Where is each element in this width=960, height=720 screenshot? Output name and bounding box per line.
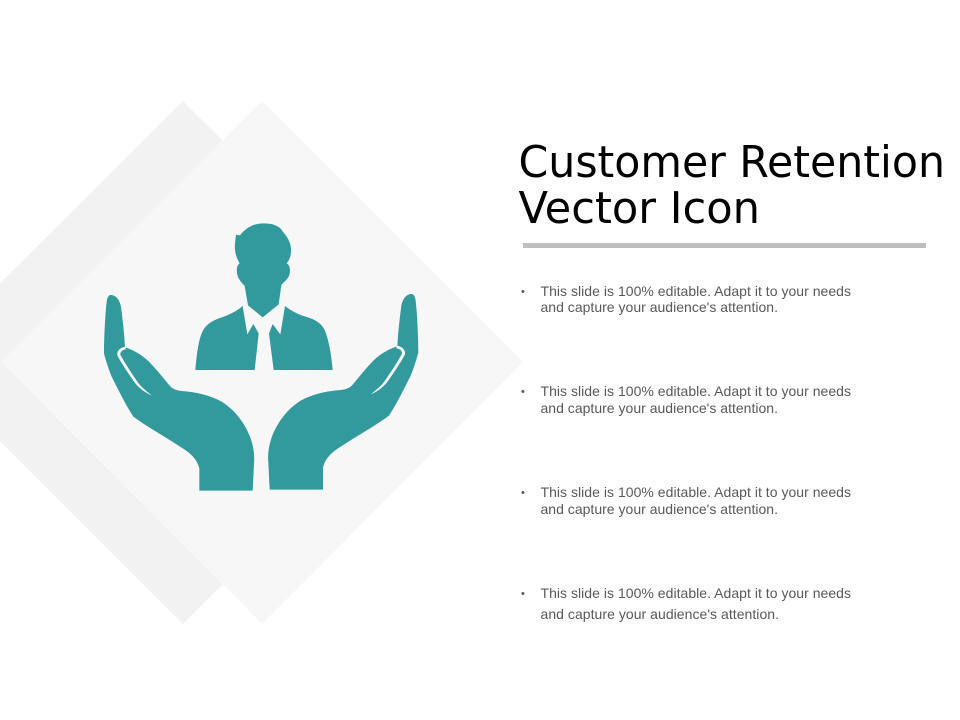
icon: right hand bbox=[268, 294, 418, 490]
text block 4: • bbox=[521, 588, 525, 600]
text block 2 bbox=[521, 383, 851, 416]
icon: hands holding customer bbox=[104, 223, 418, 491]
title: Vector Icon bbox=[518, 183, 760, 234]
text block 4 bbox=[521, 585, 851, 622]
front diamond bbox=[1, 101, 523, 624]
text block 3: • bbox=[521, 487, 525, 499]
title underline bbox=[523, 243, 926, 248]
text block 1: • bbox=[521, 286, 525, 298]
text block 1: This slide is 100% editable. Adapt it to your needs bbox=[540, 283, 851, 299]
text block 2: • bbox=[521, 386, 525, 398]
text block 4: This slide is 100% editable. Adapt it to your needs bbox=[540, 585, 851, 601]
text block 2: and capture your audience's attention. bbox=[540, 400, 778, 416]
text block 1: and capture your audience's attention. bbox=[540, 299, 778, 315]
text block 4: and capture your audience's attention. bbox=[540, 606, 779, 622]
text block 2: This slide is 100% editable. Adapt it to your needs bbox=[540, 383, 851, 399]
icon: person bbox=[195, 223, 333, 370]
text block 1 bbox=[521, 283, 851, 315]
icon: left hand bbox=[104, 295, 254, 491]
text block 3: This slide is 100% editable. Adapt it to your needs bbox=[540, 484, 851, 500]
text block 3: and capture your audience's attention. bbox=[540, 501, 778, 517]
text block 3 bbox=[521, 484, 851, 517]
title: Customer Retention bbox=[518, 137, 945, 188]
title bbox=[518, 137, 945, 234]
back diamond bbox=[0, 101, 445, 624]
